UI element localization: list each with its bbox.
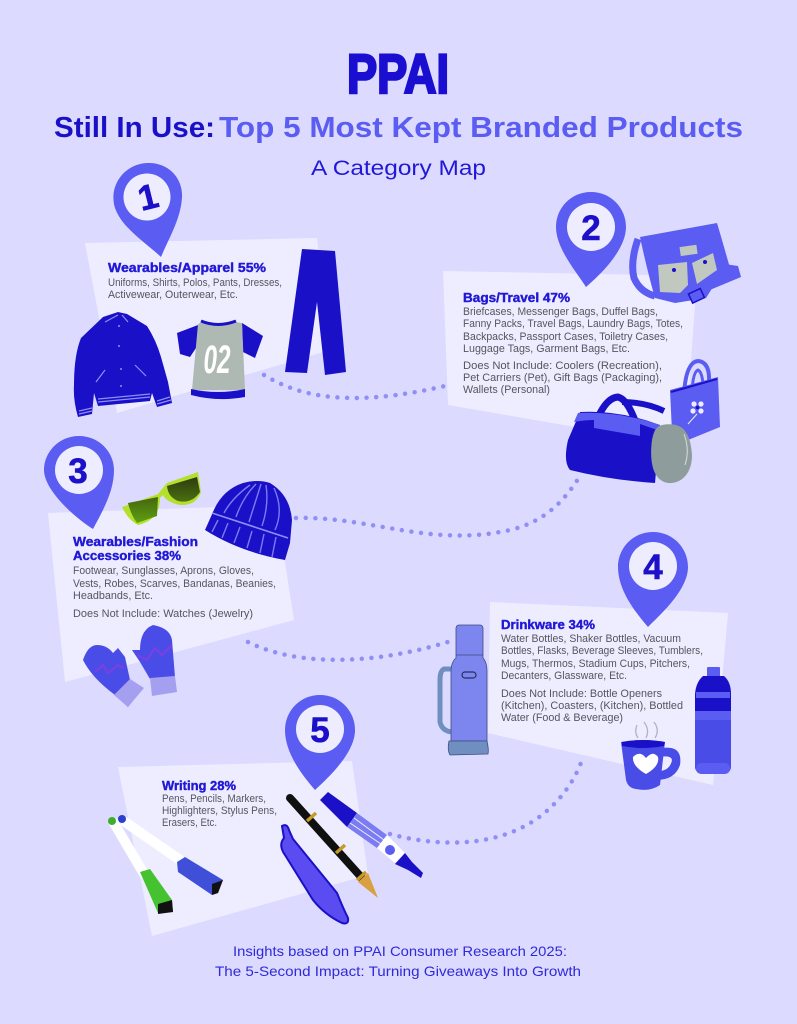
- icon: tote bag: [670, 361, 720, 440]
- text: writing: Highlighters, Stylus Pens,: [162, 805, 277, 817]
- text: bags travel: [463, 291, 683, 396]
- pin 3: 3: [68, 452, 88, 491]
- panel: bags travel background: [443, 271, 697, 446]
- icon: coffee mug: [621, 722, 680, 790]
- icon: jersey: 02: [204, 338, 230, 382]
- text: fashion accessories: Does Not Include: Watches (Jewelry): [73, 608, 253, 620]
- icon: mittens: [83, 625, 177, 707]
- text: fashion accessories: [73, 535, 276, 620]
- icon: green marker: [108, 817, 173, 914]
- panel: drinkware background: [488, 602, 728, 785]
- dotted connector 4 to 5: [390, 760, 582, 843]
- text: fashion accessories: Headbands, Etc.: [73, 590, 153, 602]
- text: fashion accessories: Wearables/Fashion: [73, 535, 198, 549]
- dotted connector 1 to 2: [264, 375, 445, 398]
- panel: wearables apparel background: [85, 238, 330, 413]
- pin 3: [44, 436, 114, 529]
- dotted connector 2 to 3: [296, 476, 580, 536]
- icon: water bottle: [695, 667, 731, 774]
- text: writing: Erasers, Etc.: [162, 817, 217, 829]
- pin 2: 2: [581, 209, 601, 248]
- icon: pants: [285, 249, 346, 375]
- text: drinkware: Bottles, Flasks, Beverage Sleeves, Tumblers,: [501, 645, 703, 657]
- icon: messenger bag: [633, 223, 741, 303]
- logo: PPAI: PPAI: [347, 42, 449, 105]
- text: bags travel: Pet Carriers (Pet), Gift Bags (Packaging),: [463, 372, 662, 384]
- pin 4: [618, 532, 688, 627]
- text: drinkware: [501, 618, 703, 724]
- text: bags travel: Bags/Travel 47%: [463, 291, 570, 305]
- text: bags travel: Does Not Include: Coolers (Recreation),: [463, 360, 662, 372]
- text: writing: Writing 28%: [162, 779, 236, 793]
- text: drinkware: Mugs, Thermos, Stadium Cups, Pitchers,: [501, 658, 690, 670]
- text: bags travel: Fanny Packs, Travel Bags, Laundry Bags, Totes,: [463, 318, 683, 330]
- icon: sunglasses: [122, 472, 201, 525]
- subtitle: A Category Map: [311, 157, 486, 180]
- pin 5: 5: [310, 711, 330, 750]
- text: writing: [162, 779, 277, 829]
- title: Still In Use:: [54, 112, 215, 144]
- icon: striped marker: [320, 792, 423, 878]
- icon: duffel bag: [566, 397, 692, 483]
- text: bags travel: Luggage Tags, Garment Bags, Etc.: [463, 343, 630, 355]
- text: wearables apparel: Uniforms, Shirts, Polos, Pants, Dresses,: [108, 277, 282, 289]
- icon: fountain pen: [290, 798, 378, 898]
- text: writing: Pens, Pencils, Markers,: [162, 793, 266, 805]
- dotted connector 3 to 4: [248, 640, 454, 660]
- text: drinkware: Decanters, Glassware, Etc.: [501, 670, 627, 682]
- pin 5: [285, 695, 355, 790]
- pin 2: [556, 192, 626, 287]
- icon: blue marker: [118, 815, 223, 895]
- text: drinkware: Does Not Include: Bottle Openers: [501, 688, 662, 700]
- text: drinkware: Drinkware 34%: [501, 618, 595, 632]
- panel: writing background: [118, 761, 368, 936]
- text: drinkware: Water Bottles, Shaker Bottles, Vacuum: [501, 633, 681, 645]
- text: fashion accessories: Vests, Robes, Scarves, Bandanas, Beanies,: [73, 578, 276, 590]
- icon: thermos: [440, 625, 488, 755]
- footer: Insights based on PPAI Consumer Research 2025:: [233, 943, 567, 959]
- text: bags travel: Briefcases, Messenger Bags, Duffel Bags,: [463, 306, 658, 318]
- icon: varsity jacket: [74, 312, 172, 417]
- text: wearables apparel: Activewear, Outerwear, Etc.: [108, 289, 238, 301]
- text: fashion accessories: Accessories 38%: [73, 549, 181, 563]
- footer: The 5-Second Impact: Turning Giveaways Into Growth: [215, 963, 581, 979]
- text: wearables apparel: Wearables/Apparel 55%: [108, 261, 266, 275]
- text: drinkware: (Kitchen), Coasters, (Kitchen), Bottled: [501, 700, 683, 712]
- footer: [215, 943, 581, 979]
- icon: jersey: [177, 321, 263, 399]
- text: bags travel: Wallets (Personal): [463, 384, 550, 396]
- text: wearables apparel: [108, 261, 282, 301]
- icon: beanie: [205, 481, 292, 560]
- icon: ballpoint pen: [281, 825, 348, 923]
- text: fashion accessories: Footwear, Sunglasses, Aprons, Gloves,: [73, 565, 254, 577]
- title: Top 5 Most Kept Branded Products: [219, 112, 743, 144]
- pin 1: 1: [134, 176, 162, 219]
- panel: fashion accessories background: [48, 505, 294, 682]
- pin 1: [113, 163, 182, 257]
- text: drinkware: Water (Food & Beverage): [501, 712, 623, 724]
- text: bags travel: Backpacks, Passport Cases, Toiletry Cases,: [463, 331, 668, 343]
- pin 4: 4: [643, 548, 663, 587]
